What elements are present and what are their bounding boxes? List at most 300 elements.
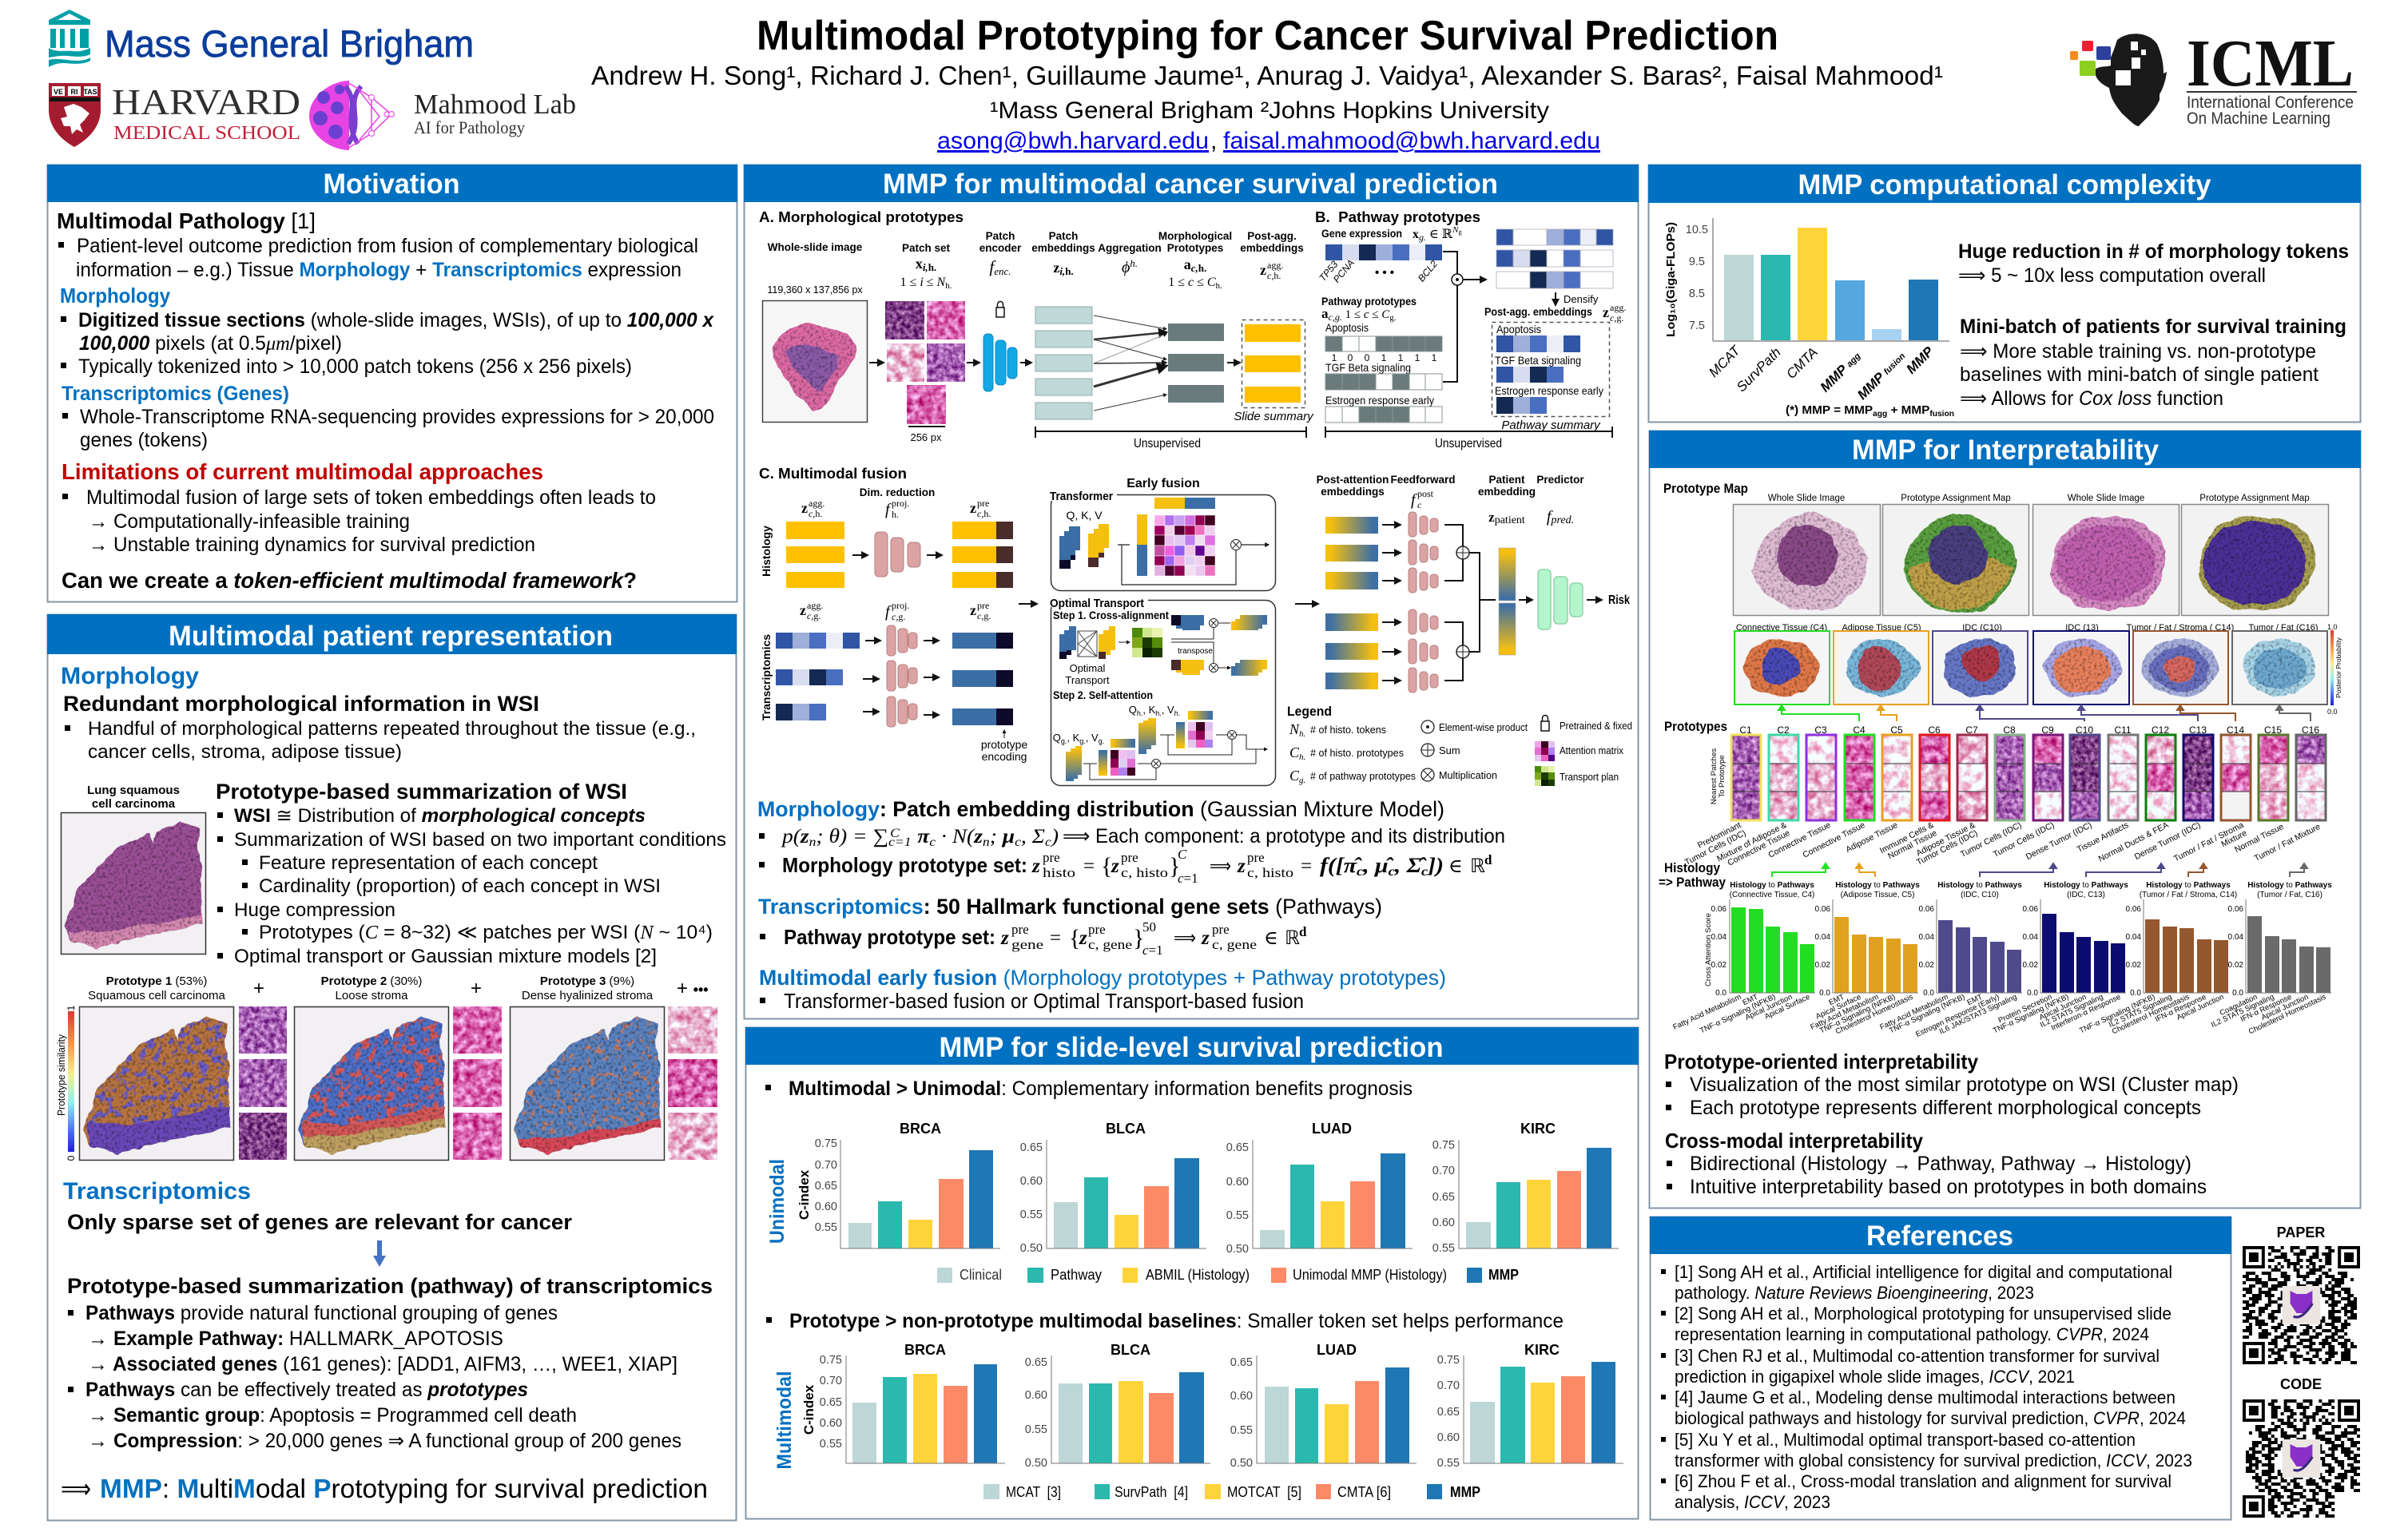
logo: Harvard Medical School: RI <box>70 88 78 96</box>
prototypes strip row: C2 <box>1777 724 1790 736</box>
formula: morphology prototype set: , <box>1394 854 1407 877</box>
text block: token reduction: Huge reduction in # of morphology tokens <box>1958 240 2349 263</box>
transcriptomics branch: c,g. <box>807 610 821 621</box>
diagram A: morphological prototypes: h. <box>928 261 936 273</box>
formula: pathway prototype set: d <box>1299 924 1307 939</box>
QR code: code <box>2241 1376 2362 1519</box>
logo: Mass General Brigham: Mass General Brigham <box>105 22 474 65</box>
diagram A: morphological prototypes: Slide summary <box>1234 410 1314 423</box>
text block: prototype-oriented interpretability <box>1664 1050 2239 1119</box>
prototypes strip row: C6 <box>1928 724 1941 736</box>
formula: morphology prototype set: Σ̂ <box>1407 854 1420 877</box>
text block: multimodal pathology <box>57 208 698 281</box>
panel: Multimodal patient representation <box>47 614 737 1521</box>
bar chart: adipose tissue C5 pathways: Fatty Acid Metabolism <box>1809 993 1880 1032</box>
histology to pathway section: Histology to Pathways <box>2146 881 2231 890</box>
logo: ICML: On Machine Learning <box>2187 109 2330 128</box>
figure: lung squamous cell carcinoma slide: cell carcinoma <box>92 797 176 811</box>
optimal transport fusion box: g. <box>1061 737 1067 745</box>
formula: morphology prototype set: f([π̂ <box>1320 854 1355 877</box>
formula: morphology prototype set: = <box>1301 855 1312 877</box>
prototype concept labels <box>1683 820 2322 868</box>
legend: Pretrained & fixed <box>1560 720 1632 732</box>
bar chart: tumor fat stroma C14 pathways: Cholesterol Homeostasis <box>2111 993 2191 1036</box>
optimal transport fusion box <box>1048 595 1275 786</box>
legend: Legend <box>1287 704 1332 719</box>
QR code: paper <box>2241 1224 2362 1366</box>
bar chart: KIRC unimodal: KIRC <box>1520 1121 1556 1137</box>
plus and ellipsis: + ••• <box>677 978 709 999</box>
prototypes strip row: C4 <box>1853 724 1866 736</box>
text block: prototype-based summarization of WSI: Summarization of WSI based on two important conditions <box>234 829 726 851</box>
contact emails: , <box>1210 128 1217 154</box>
bar chart: LUAD multimodal <box>1230 1342 1417 1470</box>
bar chart: LUAD unimodal <box>1226 1121 1413 1256</box>
bar chart: BLCA multimodal: 0.55 <box>1025 1423 1047 1436</box>
text block: morphology: Morphology <box>60 284 170 308</box>
bar chart: BRCA unimodal <box>815 1121 1000 1248</box>
optimal transport fusion box: Transport <box>1065 674 1110 686</box>
diagram A: morphological prototypes: h. <box>1198 262 1206 274</box>
bar chart: BRCA unimodal: 0.65 <box>815 1180 837 1193</box>
histology to pathway section: => Pathway <box>1659 875 1726 890</box>
prototype 1 heatmap <box>80 974 287 1160</box>
prototype probability maps: Posterior Probability <box>2334 637 2342 698</box>
bullet: multimodal vs unimodal: Multimodal > Unimodal: Complementary information benefits prognosis <box>789 1078 1413 1100</box>
bar chart: computational cost: agg <box>1873 410 1887 419</box>
prototypes strip row: C11 <box>2114 724 2132 736</box>
legend: multimodal: MMP <box>1450 1484 1480 1500</box>
bar chart: LUAD unimodal: 0.55 <box>1226 1209 1249 1222</box>
prototype maps: Prototype Map <box>1663 481 1748 496</box>
logo: Harvard Medical School: HARVARD <box>112 81 300 122</box>
text block: multimodal early fusion <box>759 966 1446 1013</box>
bar chart: tumor fat stroma C14 pathways: 0.06 <box>2126 905 2141 914</box>
optimal transport fusion box: transpose <box>1178 647 1213 656</box>
text block: pathway summarization: → <box>88 1353 108 1375</box>
prototype maps: Whole Slide Image <box>1768 494 1845 503</box>
prototype probability maps: 1.0 <box>2327 623 2338 631</box>
text block: transcriptomics hallmark sets: Pathway prototype set: <box>784 925 995 949</box>
text block: morphology: 100,000 pixels (at 0.5μm/pixel) <box>79 332 342 355</box>
text block: mini-batch training: Mini-batch of patients for survival training <box>1960 316 2346 338</box>
text block: pathway summarization: → <box>88 1430 108 1452</box>
heading: Motivation: Motivation <box>323 169 460 200</box>
bar chart: connective tissue C4 pathways: 0.04 <box>1711 933 1726 942</box>
formula: pathway prototype set: gene <box>1011 937 1043 952</box>
bar chart: KIRC multimodal <box>1437 1342 1623 1470</box>
diagram C: multimodal fusion: C. Multimodal fusion <box>759 466 907 482</box>
bar chart: LUAD multimodal: LUAD <box>1317 1342 1357 1358</box>
bar chart: computational cost: agg <box>1845 351 1863 369</box>
prototype 3 heatmap <box>510 974 717 1160</box>
text block: prototype-oriented interpretability: Prototype-oriented interpretability <box>1664 1050 1978 1074</box>
legend: N <box>1289 721 1299 737</box>
bar chart: computational cost: MMP <box>1903 343 1937 377</box>
diagram A: morphological prototypes: 119,360 x 137,856 px <box>767 284 863 296</box>
prototypes strip row: To Prototype <box>1718 755 1726 798</box>
bar chart: adipose tissue C5 pathways <box>1809 899 1918 1036</box>
prototypes strip row: C15 <box>2264 724 2282 736</box>
logo: Mahmood Lab: AI for Pathology <box>414 117 525 137</box>
bar chart: KIRC multimodal: 0.55 <box>1437 1457 1460 1470</box>
transcriptomics branch: Transcriptomics <box>760 634 773 720</box>
bullet: prototype vs baselines: Prototype > non-prototype multimodal baselines: Smaller token set helps performance <box>789 1310 1564 1332</box>
bar chart: LUAD multimodal: 0.60 <box>1230 1390 1253 1403</box>
authors: Andrew H. Song¹, Richard J. Chen¹, Guillaume Jaume¹, Anurag J. Vaidya¹, Alexander S. Baras², Faisal Mahmood¹ <box>591 61 1943 90</box>
bar chart: BRCA unimodal: 0.60 <box>815 1201 837 1213</box>
logo: Harvard Medical School: MEDICAL SCHOOL <box>113 123 300 144</box>
diagram A: morphological prototypes: h. <box>1216 281 1222 291</box>
text block: transcriptomics: genes (tokens) <box>80 429 208 451</box>
text block: morphology GMM: ; <box>990 826 1003 847</box>
diagram B: pathway prototypes: Post-agg. embeddings <box>1484 305 1592 318</box>
reference list: biological pathways and histology for survival prediction, CVPR, 2024 <box>1675 1408 2186 1428</box>
bar chart: tumor fat C16 pathways: Cholesterol Homeostasis <box>2247 993 2327 1036</box>
colorbar: prototype similarity <box>55 1005 77 1161</box>
text block: morphology redundancy <box>61 663 696 763</box>
heading: References: References <box>1866 1220 2013 1252</box>
prototype concept labels: Tumor Cells (IDC) <box>1992 820 2056 859</box>
formula: pathway prototype set: 50 <box>1142 919 1156 935</box>
bar chart: BLCA unimodal <box>1020 1121 1206 1255</box>
legend: C <box>1289 744 1299 760</box>
formula: pathway prototype set: c, gene <box>1212 937 1257 952</box>
text block: morphology GMM <box>757 797 1505 877</box>
optimal transport fusion box: g. <box>1079 737 1086 745</box>
axis label: unimodal C-index: Unimodal <box>766 1159 789 1244</box>
diagram A: morphological prototypes: Morphological <box>1158 230 1232 242</box>
legend: unimodal: Clinical <box>960 1267 1002 1283</box>
formula: pathway prototype set: { <box>1069 925 1080 951</box>
legend: Element-wise product <box>1439 721 1528 733</box>
text block: cross-modal interpretability: Cross-modal interpretability <box>1665 1129 1924 1153</box>
legend: unimodal: MMP <box>1488 1267 1519 1283</box>
post-attention and patient embedding branch: patient <box>1495 514 1525 526</box>
legend: h. <box>1299 752 1305 762</box>
bar chart: KIRC multimodal: 0.65 <box>1437 1406 1460 1419</box>
optimal transport fusion box: Q <box>1053 732 1061 744</box>
formula: morphology prototype set: ℝ <box>1470 855 1485 877</box>
bar chart: LUAD unimodal: 0.65 <box>1226 1141 1249 1154</box>
text block: pathway summarization: Prototype-based summarization (pathway) of transcriptomics <box>67 1274 713 1298</box>
diagram B: pathway prototypes: g. <box>1389 313 1397 323</box>
diagram A: morphological prototypes: i, <box>1059 265 1065 277</box>
transcriptomics branch: f <box>885 603 892 621</box>
histology branch: z <box>970 500 976 516</box>
diagram B: pathway prototypes: 0 <box>1348 352 1353 363</box>
text block: morphology GMM: ; θ) = <box>816 826 872 847</box>
bar chart: adipose tissue C5 pathways: 0.0 <box>1819 989 1830 998</box>
bar chart: computational cost: 8.5 <box>1689 288 1705 300</box>
diagram A: morphological prototypes: Post-agg. <box>1247 230 1297 242</box>
bar chart: computational cost: (*) MMP = MMP <box>1786 403 1871 417</box>
prototype maps <box>1663 481 2328 615</box>
transcriptomics branch: prototype <box>981 738 1027 751</box>
bar chart: BLCA unimodal: 0.65 <box>1020 1141 1043 1154</box>
diagram A: morphological prototypes <box>759 209 1314 450</box>
formula: morphology prototype set: ]) <box>1426 854 1444 877</box>
text block: prototype-based summarization of WSI: Feature representation of each concept <box>259 852 598 874</box>
prototype 1 heatmap: Squamous cell carcinoma <box>88 989 226 1002</box>
bar chart: KIRC multimodal: 0.60 <box>1437 1431 1460 1444</box>
bar chart: BRCA multimodal: 0.70 <box>820 1375 842 1387</box>
formula: pathway prototype set: ⟹ <box>1174 927 1196 949</box>
formula: morphology prototype set: ⟹ <box>1210 855 1231 877</box>
text block: prototype-based summarization of WSI: Prototypes (C = 8~32) ≪ patches per WSI ( N ~ 10⁴) <box>259 922 713 943</box>
optimal transport fusion box: , K <box>1142 704 1156 716</box>
text block: morphology GMM: c <box>1015 835 1021 849</box>
bar chart: connective tissue C4 pathways: Apical Surface <box>1763 993 1811 1022</box>
text block: morphology GMM: μ <box>1001 826 1015 847</box>
text block: token reduction: ⟹ 5 ~ 10x less computation overall <box>1958 264 2266 287</box>
text block: prototype-based summarization of WSI: Cardinality (proportion) of each concept in WSI <box>259 875 661 897</box>
text block: cross-modal interpretability: Intuitive interpretability based on prototypes in both domains <box>1690 1176 2207 1198</box>
diagram A: morphological prototypes: c,h. <box>1267 270 1281 281</box>
logo: ICML: International Conference <box>2187 93 2354 112</box>
bar chart: IDC C13 pathways: 0.0 <box>2027 989 2038 998</box>
bar chart: LUAD unimodal: 0.50 <box>1226 1243 1249 1256</box>
optimal transport fusion box: h. <box>1155 709 1162 717</box>
text block: transcriptomics hallmark sets: Transcriptomics: 50 Hallmark functional gene sets (Pathways) <box>758 895 1382 919</box>
histology to pathway section: (IDC, C13) <box>2067 891 2105 899</box>
transcriptomics branch: encoding <box>982 750 1027 763</box>
prototype maps: Prototype Assignment Map <box>1901 494 2011 503</box>
diagram B: pathway prototypes: Gene expression <box>1321 227 1402 240</box>
affiliations: ¹Mass General Brigham ²Johns Hopkins University <box>990 97 1549 124</box>
diagram A: morphological prototypes: h. <box>1130 257 1138 269</box>
text block: transcriptomics hallmark sets <box>758 895 1382 949</box>
text block: transcriptomics sparse genes: Only sparse set of genes are relevant for cancer <box>67 1210 573 1234</box>
bar chart: BLCA multimodal: 0.60 <box>1025 1389 1047 1402</box>
text block: pathway summarization: Example Pathway: HALLMARK_APOTOSIS <box>113 1328 503 1350</box>
bar chart: computational cost: + MMP <box>1887 403 1929 417</box>
diagram B: pathway prototypes: 1 <box>1432 352 1437 363</box>
conclusion callout: MMP: ⟹ <box>61 1474 91 1503</box>
QR code: code: CODE <box>2280 1376 2322 1392</box>
bar chart: computational cost: MMP <box>1818 363 1850 395</box>
prototype concept labels: Tumor / Fat / Stroma <box>2172 820 2246 863</box>
text block: morphology: Typically tokenized into > 10,000 patch tokens (256 x 256 pixels) <box>78 355 632 378</box>
transcriptomics branch: pre <box>977 600 989 611</box>
text block: morphology GMM: π <box>917 826 931 847</box>
formula: morphology prototype set: μ̂ <box>1375 854 1386 877</box>
formula: pathway prototype set: z <box>1201 927 1210 949</box>
legend: multimodal: MOTCAT [5] <box>1227 1484 1301 1500</box>
bar chart: IDC C10 pathways <box>1878 899 2022 1039</box>
text block: morphology redundancy: Morphology <box>61 663 199 689</box>
prototype probability maps: Adipose Tissue (C5) <box>1842 623 1921 633</box>
bar chart: tumor fat stroma C14 pathways: 0.04 <box>2126 933 2141 942</box>
bar chart: BRCA multimodal: 0.60 <box>820 1417 842 1430</box>
legend: unimodal <box>937 1267 1519 1283</box>
prototype probability maps: IDC (13) <box>2065 623 2099 633</box>
histology branch: Dim. reduction <box>860 486 935 498</box>
question callout: Can we create a token-efficient multimodal framework? <box>62 568 637 593</box>
text block: prototype-oriented interpretability: Each prototype represents different morphological concepts <box>1690 1097 2201 1119</box>
bar chart: tumor fat C16 pathways: 0.02 <box>2228 961 2243 970</box>
diagram B: pathway prototypes: B. Pathway prototypes <box>1315 209 1480 225</box>
bar chart: IDC C13 pathways: Apical Junction <box>2038 993 2088 1022</box>
legend: unimodal: Unimodal MMP (Histology) <box>1293 1267 1447 1283</box>
diagram A: morphological prototypes: z <box>1260 262 1266 278</box>
prototypes strip row: C14 <box>2227 724 2244 736</box>
bar chart: adipose tissue C5 pathways: TNF-α Signaling (NFKB) <box>1818 993 1897 1035</box>
diagram B: pathway prototypes: 1 <box>1332 352 1337 363</box>
reference list: [3] Chen RJ et al., Multimodal co-attention transformer for survival <box>1675 1346 2160 1366</box>
text block: cross-modal interpretability <box>1665 1129 2207 1198</box>
bar chart: computational cost: SurvPath <box>1734 344 1784 395</box>
prototypes strip row: Nearest Patches <box>1710 748 1719 804</box>
diagram A: morphological prototypes: embeddings <box>1031 242 1095 254</box>
axis label: multimodal C-index <box>773 1371 817 1470</box>
post-attention and patient embedding branch: Risk <box>1608 593 1630 607</box>
prototype probability maps: IDC (C10) <box>1962 623 2002 633</box>
formula: morphology prototype set: { <box>1101 853 1112 879</box>
histology to pathway section: Cross Attention Score <box>1704 913 1713 986</box>
formula: morphology prototype set: } <box>1169 853 1180 879</box>
optimal transport fusion box: Q <box>1129 704 1137 716</box>
histology to pathway section: (Connective Tissue, C4) <box>1730 891 1814 899</box>
post-attention and patient embedding branch: c <box>1417 499 1422 510</box>
optimal transport fusion box: Optimal Transport <box>1050 597 1144 610</box>
bar chart: connective tissue C4 pathways <box>1671 899 1815 1035</box>
bar chart: computational cost: 10.5 <box>1686 224 1708 236</box>
diagram B: pathway prototypes: Estrogen response early <box>1325 394 1434 407</box>
diagram A: morphological prototypes: 256 px <box>910 431 942 443</box>
bar chart: BLCA unimodal: 0.50 <box>1020 1242 1043 1255</box>
bar chart: BRCA unimodal: 0.55 <box>815 1221 837 1234</box>
text block: multimodal pathology: Patient-level outcome prediction from fusion of complementary biological <box>77 235 698 257</box>
formula: morphology prototype set: histo <box>1043 865 1075 880</box>
prototype concept labels: Predominant <box>1696 820 1742 851</box>
text block: transcriptomics <box>62 383 714 451</box>
post-attention and patient embedding branch: Feedforward <box>1390 474 1456 486</box>
prototype concept labels: Normal Tissue <box>1886 828 1938 861</box>
bar chart: KIRC unimodal: 0.60 <box>1432 1217 1455 1229</box>
optimal transport fusion box: Optimal <box>1070 662 1106 674</box>
prototype probability maps <box>1734 623 2342 716</box>
diagram A: morphological prototypes: i, <box>923 261 928 273</box>
prototypes strip row <box>1664 719 2326 820</box>
heading: MMP for Interpretability: MMP for Interpretability <box>1852 435 2160 466</box>
diagram B: pathway prototypes: Apoptosis <box>1496 323 1541 335</box>
prototypes strip row: C8 <box>2003 724 2016 736</box>
plus sign: + <box>253 978 264 999</box>
prototype maps: Prototype Assignment Map <box>2199 494 2310 503</box>
bar chart: IDC C13 pathways: TNF-α Signaling (NFKB) <box>1992 993 2070 1035</box>
histology branch: c,h. <box>809 508 822 519</box>
formula: morphology prototype set <box>1031 847 1492 886</box>
diagram B: pathway prototypes: PCNA <box>1331 257 1357 285</box>
formula: pathway prototype set: pre <box>1011 922 1029 937</box>
bar chart: computational cost: 9.5 <box>1689 256 1705 268</box>
reference list: [5] Xu Y et al., Multimodal optimal transport-based co-attention <box>1675 1430 2136 1450</box>
formula: pathway prototype set: c=1 <box>1142 943 1163 958</box>
heading: MMP computational complexity: MMP computational complexity <box>1798 169 2211 200</box>
text block: morphology GMM: n <box>983 835 990 849</box>
diagram B: pathway prototypes <box>1315 209 1626 450</box>
optimal transport fusion box: Step 1. Cross-alignment <box>1053 609 1169 621</box>
post-attention and patient embedding branch: f <box>1411 491 1417 509</box>
diagram A: morphological prototypes: h. <box>1065 265 1074 277</box>
prototypes strip row: C7 <box>1965 724 1978 736</box>
optimal transport fusion box: , V <box>1086 732 1099 744</box>
text block: morphology redundancy: Handful of morphological patterns repeated throughout the tissue (e.g., <box>88 718 696 740</box>
bar chart: tumor fat C16 pathways: 0.0 <box>2232 989 2243 998</box>
bar chart: IDC C13 pathways: IL2 STAT5 Signaling <box>2039 993 2104 1030</box>
text block: transcriptomics: Whole-Transcriptome RNA-sequencing provides expressions for > 20,000 <box>80 406 714 428</box>
text block: pathway summarization <box>67 1274 713 1452</box>
prototype concept labels: Connective Tissue <box>1801 820 1867 860</box>
text block: morphology GMM: ⟹ Each component: a prototype and its distribution <box>1063 825 1505 847</box>
diagram B: pathway prototypes: Unsupervised <box>1435 437 1502 450</box>
bar chart: IDC C10 pathways: TNF-α Signaling (NFKB) <box>1888 993 1966 1035</box>
text block: morphology GMM: ∑ <box>872 826 888 847</box>
bar chart: BRCA multimodal: BRCA <box>904 1342 946 1358</box>
formula: morphology prototype set: pre <box>1043 850 1060 865</box>
formula: morphology prototype set: pre <box>1247 850 1265 865</box>
bar chart: KIRC unimodal: 0.55 <box>1432 1242 1455 1255</box>
formula: morphology prototype set: , <box>1362 854 1375 877</box>
post-attention and patient embedding branch: embeddings <box>1321 486 1385 498</box>
diagram A: morphological prototypes: Unsupervised <box>1134 437 1201 450</box>
logo: Harvard Medical School: VE <box>54 88 63 96</box>
formula: morphology prototype set: d <box>1484 852 1492 867</box>
prototype concept labels: Dense Tumor (IDC) <box>2133 820 2202 862</box>
bar chart: connective tissue C4 pathways: 0.06 <box>1711 905 1726 914</box>
histology branch: z <box>801 500 808 516</box>
bar chart: tumor fat C16 pathways: 0.04 <box>2228 933 2243 942</box>
text block: morphology GMM: · <box>936 826 952 847</box>
formula: pathway prototype set: ∈ <box>1264 928 1278 949</box>
bar chart: computational cost: fusion <box>1882 351 1908 377</box>
bar chart: IDC C10 pathways: Fatty Acid Metabolism <box>1878 993 1949 1032</box>
text block: limitations: → Unstable training dynamics for survival prediction <box>89 534 535 556</box>
bar chart: LUAD multimodal: 0.65 <box>1230 1356 1253 1369</box>
histology branch: agg. <box>809 498 824 509</box>
panel: Motivation <box>47 165 737 602</box>
logo: Mahmood Lab: Mahmood Lab <box>414 89 576 120</box>
logo: ICML: ICML <box>2187 26 2354 101</box>
diagram A: morphological prototypes: Patch <box>986 230 1015 242</box>
formula: pathway prototype set: pre <box>1088 922 1106 937</box>
bar chart: BRCA multimodal: 0.65 <box>820 1396 842 1409</box>
bar chart: BRCA multimodal <box>820 1342 1005 1463</box>
text block: transcriptomics: Transcriptomics (Genes) <box>62 383 289 405</box>
histology to pathway section: (Tumor / Fat, C16) <box>2257 891 2322 899</box>
reference list: analysis, ICCV, 2023 <box>1675 1492 1830 1512</box>
histology to pathway section: Histology to Pathways <box>1937 881 2022 890</box>
bar chart: BLCA multimodal: 0.65 <box>1025 1356 1047 1369</box>
diagram B: pathway prototypes: z <box>1603 304 1609 320</box>
text block: token reduction <box>1958 240 2349 287</box>
diagram B: pathway prototypes: Estrogen response early <box>1495 384 1603 397</box>
bar chart: LUAD multimodal: 0.55 <box>1230 1424 1253 1437</box>
bar chart: BLCA unimodal: 0.55 <box>1020 1209 1043 1221</box>
text block: mini-batch training: ⟹ More stable training vs. non-prototype <box>1960 340 2316 363</box>
formula: morphology prototype set: c, histo <box>1247 865 1293 880</box>
text block: morphology GMM: ) <box>1050 826 1059 847</box>
prototype concept labels: Tumor / Fat Mixture <box>2253 822 2322 863</box>
histology to pathway section <box>1659 860 2332 986</box>
legend: Attention matrix <box>1560 745 1624 756</box>
bar chart: BLCA unimodal: 0.60 <box>1020 1175 1043 1188</box>
bar chart: computational cost <box>1664 218 1954 419</box>
diagram B: pathway prototypes: agg. <box>1610 302 1626 313</box>
text block: morphology GMM: c=1 <box>888 835 912 849</box>
text block: pathway summarization: → <box>88 1328 108 1350</box>
